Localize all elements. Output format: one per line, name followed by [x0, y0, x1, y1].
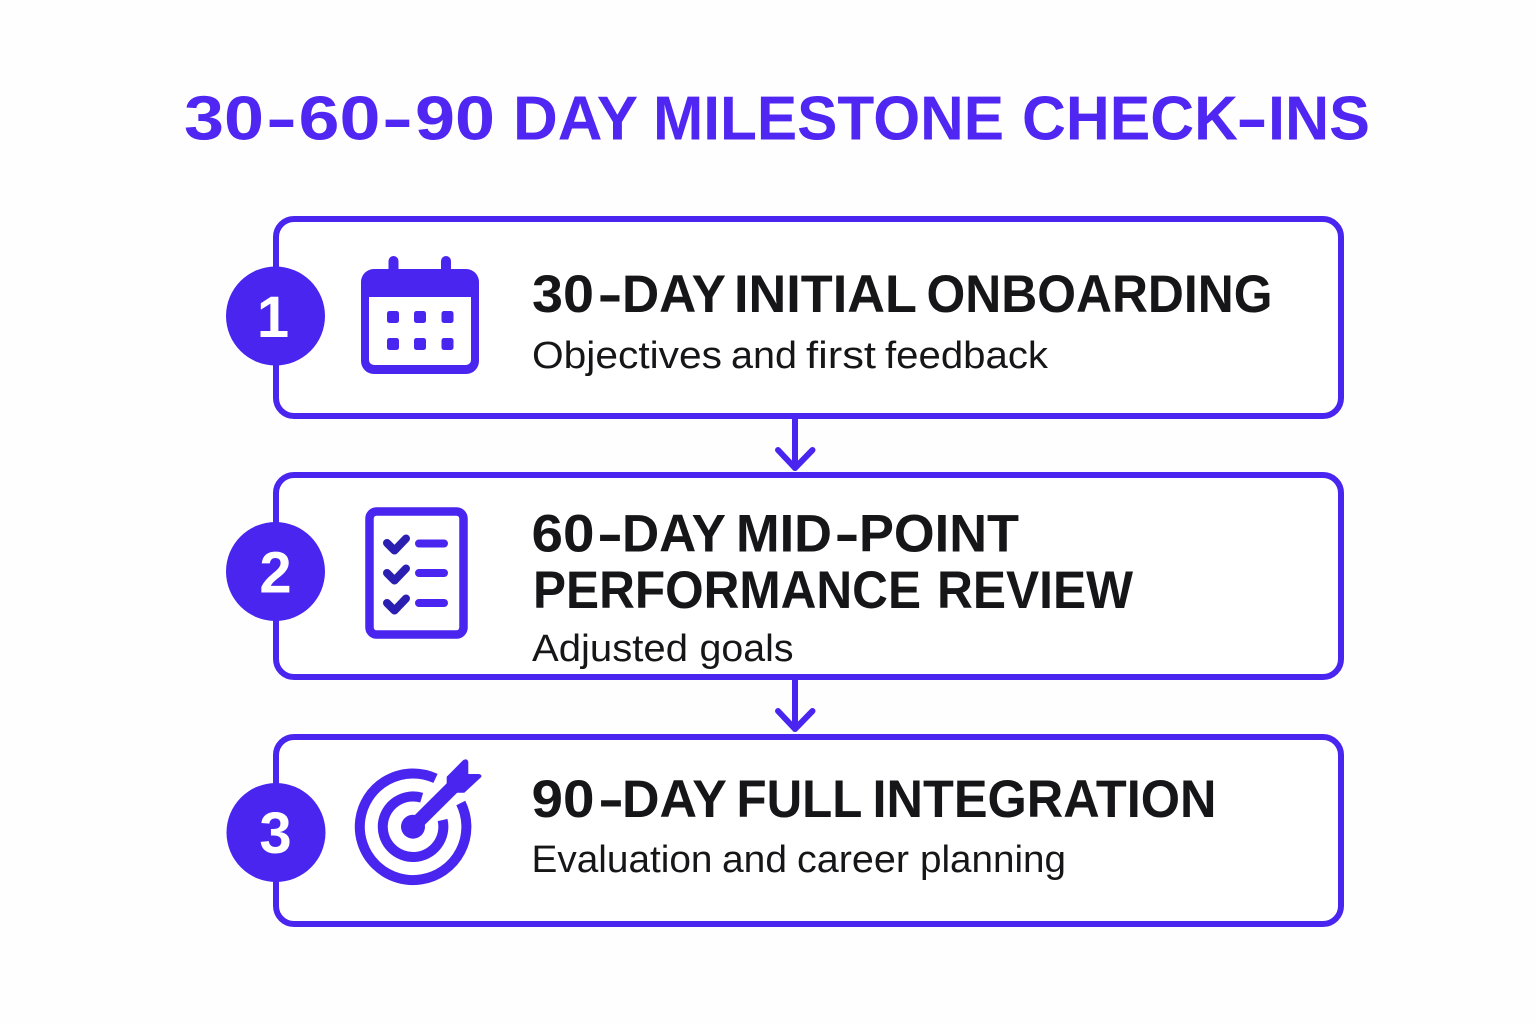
- heading 3: INTEGRATION: [872, 770, 1216, 829]
- title: 90: [415, 84, 495, 154]
- panel: 90-day full integration: [226, 737, 1341, 924]
- heading 3: DAY: [622, 770, 727, 829]
- description 2: Adjusted: [532, 628, 688, 670]
- title: MILESTONE: [653, 84, 1004, 154]
- heading 2: POINT: [859, 504, 1019, 564]
- number badge 3: 3: [259, 801, 292, 866]
- heading 1: INITIAL: [734, 265, 916, 324]
- arrow: step 2 to step 3: [778, 680, 812, 729]
- title: 60: [298, 84, 380, 154]
- description 3: Evaluation: [532, 839, 712, 881]
- heading 1: -: [598, 265, 622, 324]
- number badge 1: [226, 266, 325, 366]
- panel 3 border: [276, 737, 1341, 924]
- heading 3: FULL: [736, 770, 862, 829]
- title: 30: [184, 84, 264, 154]
- heading 3: -: [598, 770, 624, 829]
- panel: 30-day initial onboarding: [226, 219, 1341, 416]
- number badge 1: 1: [257, 285, 289, 350]
- title: INS: [1268, 84, 1370, 154]
- heading 2: -: [834, 504, 860, 564]
- panel 2 border: [276, 475, 1341, 677]
- heading 2 second line: PERFORMANCE: [533, 561, 921, 620]
- heading 2 second line: REVIEW: [937, 561, 1133, 620]
- description 1: first: [806, 335, 876, 377]
- heading 2: DAY: [622, 504, 726, 564]
- number badge 2: 2: [259, 540, 292, 606]
- title: -: [1236, 84, 1268, 154]
- title: CHECK: [1022, 84, 1238, 154]
- description 1: Objectives: [532, 335, 722, 377]
- heading 1: ONBOARDING: [926, 265, 1272, 324]
- description 3: and: [722, 839, 787, 881]
- panel 1 border: [276, 219, 1341, 416]
- title: -: [266, 84, 297, 154]
- description 3: career: [797, 839, 909, 881]
- number badge 2: [226, 522, 325, 621]
- description 1: and: [731, 335, 797, 377]
- icon: calendar: [361, 256, 479, 374]
- description 2: goals: [700, 628, 794, 670]
- heading 2: 60: [532, 504, 594, 564]
- heading 2: -: [597, 504, 623, 564]
- title: -: [382, 84, 413, 154]
- icon: target with arrow: [360, 759, 481, 880]
- heading 1: 30: [532, 265, 594, 324]
- description 1: feedback: [885, 335, 1049, 377]
- heading 2: MID: [736, 504, 832, 564]
- heading 1: DAY: [622, 265, 726, 324]
- number badge 3: [226, 783, 326, 882]
- panel: 60-day mid-point performance review: [226, 475, 1341, 677]
- description 3: planning: [920, 839, 1066, 881]
- icon: checklist: [370, 512, 464, 634]
- heading 3: 90: [532, 770, 594, 829]
- title: DAY: [513, 84, 638, 154]
- arrow: step 1 to step 2: [778, 418, 812, 468]
